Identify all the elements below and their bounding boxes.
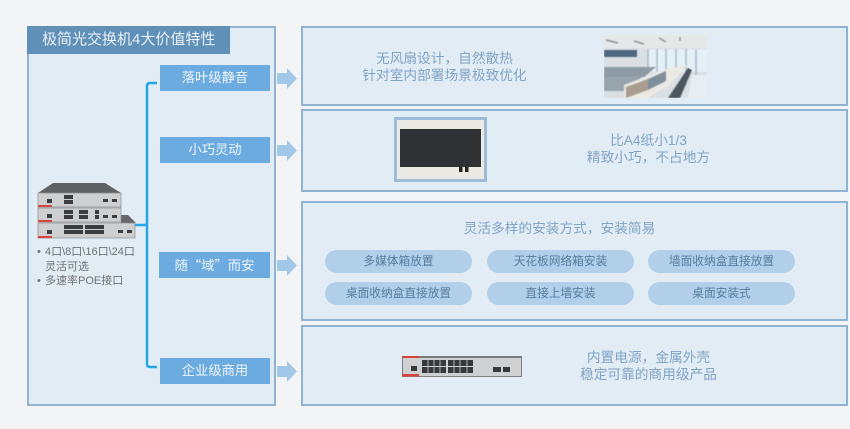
text block: switch features: 多速率POE接口 <box>45 275 123 287</box>
pill: desktop box <box>325 282 472 305</box>
text block: switch features: 4口\8口\16口\24口 <box>45 246 135 258</box>
panel: install methods <box>301 201 848 321</box>
image: switch front <box>402 356 522 377</box>
heading: overview title: 极简光交换机4大价值特性 <box>42 31 215 48</box>
label: silent <box>160 65 270 91</box>
text block: switch features: 灵活可选 <box>45 260 89 272</box>
label: flexible install: 随“域”而安 <box>175 255 254 274</box>
arrow: compact <box>277 140 297 161</box>
label: enterprise: 企业级商用 <box>182 363 248 378</box>
pill: wall mount <box>487 282 634 305</box>
pill: wall mount: 直接上墙安装 <box>525 287 596 300</box>
icon: stacked switches <box>38 183 136 238</box>
text block: enterprise description: 稳定可靠的商用级产品 <box>580 367 717 382</box>
pill: ceiling <box>487 250 634 273</box>
arrow: flexible install <box>277 255 297 276</box>
panel: compact <box>301 109 848 192</box>
pill: desktop: 桌面安装式 <box>692 287 751 300</box>
text block: enterprise description: 内置电源，金属外壳 <box>587 350 710 365</box>
text block: enterprise description <box>580 350 717 382</box>
pill: ceiling: 天花板网络箱安装 <box>514 255 607 268</box>
text block: silent description: 针对室内部署场景极致优化 <box>362 68 527 83</box>
label: compact <box>160 137 270 163</box>
label: enterprise <box>160 358 270 384</box>
panel: enterprise <box>301 325 848 406</box>
text block: compact description: 比A4纸小1/3 <box>610 133 687 148</box>
label: silent: 落叶级静音 <box>182 70 248 85</box>
image: office <box>604 36 707 98</box>
pill: wall box: 墙面收纳盒直接放置 <box>669 255 774 268</box>
image: device on A4 paper <box>394 117 487 182</box>
text block: switch features: • <box>37 275 41 287</box>
arrow: enterprise <box>277 361 297 382</box>
arrow: silent <box>277 68 297 89</box>
text block: switch features <box>37 246 135 287</box>
text block: compact description: 精致小巧，不占地方 <box>587 150 710 165</box>
pill: desktop box: 桌面收纳盒直接放置 <box>346 287 451 300</box>
pill: media box: 多媒体箱放置 <box>363 255 434 268</box>
connector bracket <box>135 82 157 368</box>
text block: silent description <box>362 51 527 83</box>
text block: compact description <box>587 133 710 165</box>
heading: overview title <box>27 26 230 54</box>
label: flexible install <box>159 252 270 278</box>
text block: switch features: • <box>37 246 41 258</box>
pill: desktop <box>648 282 795 305</box>
pill: media box <box>325 250 472 273</box>
text block: silent description: 无风扇设计，自然散热 <box>376 51 513 66</box>
panel: silent <box>301 26 848 106</box>
text: install heading: 灵活多样的安装方式，安装简易 <box>464 221 655 236</box>
label: compact: 小巧灵动 <box>188 142 242 157</box>
pill: wall box <box>648 250 795 273</box>
panel: left overview <box>27 26 276 406</box>
